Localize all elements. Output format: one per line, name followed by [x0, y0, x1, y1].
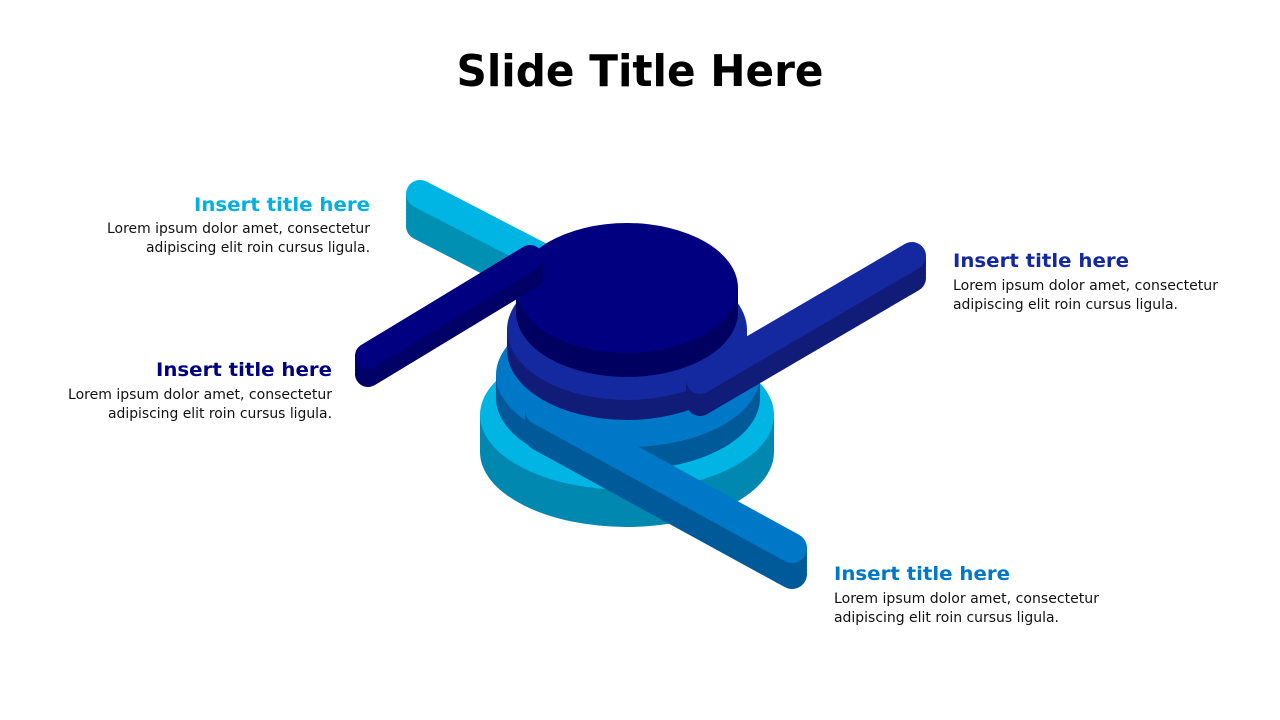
bar: blue (bottom right) — [540, 410, 792, 574]
bar: navy (left) — [368, 258, 530, 374]
text block: middle left: Insert title here — [156, 359, 332, 381]
bar: royal blue (right) — [700, 256, 912, 402]
text block: bottom right: Insert title here — [834, 563, 1010, 585]
disc 3: royal blue — [507, 260, 747, 420]
text block: right: Lorem ipsum dolor amet, consectetur — [953, 278, 1218, 294]
text block: middle left: adipiscing elit roin cursus ligula. — [108, 406, 332, 422]
text block: top left — [107, 194, 370, 256]
text block: bottom right — [834, 563, 1099, 626]
text block: right — [953, 250, 1218, 313]
text block: middle left: Lorem ipsum dolor amet, consectetur — [68, 387, 332, 403]
bar: cyan (back) — [420, 194, 600, 319]
text block: bottom right: Lorem ipsum dolor amet, consectetur — [834, 591, 1099, 607]
text block: bottom right: adipiscing elit roin cursus ligula. — [834, 610, 1059, 626]
text block: top left: Lorem ipsum dolor amet, consectetur — [107, 221, 370, 237]
disc 4: navy top — [516, 223, 738, 377]
text block: right: adipiscing elit roin cursus ligula. — [953, 297, 1178, 313]
graphic: stacked discs with bars — [368, 194, 912, 574]
disc 2: blue — [496, 303, 760, 470]
title: Slide Title Here — [456, 46, 824, 97]
text block: top left: Insert title here — [194, 194, 370, 216]
text block: top left: adipiscing elit roin cursus ligula. — [146, 240, 370, 256]
text block: middle left — [68, 359, 332, 422]
text block: right: Insert title here — [953, 250, 1129, 272]
disc 1: cyan base — [480, 340, 774, 527]
